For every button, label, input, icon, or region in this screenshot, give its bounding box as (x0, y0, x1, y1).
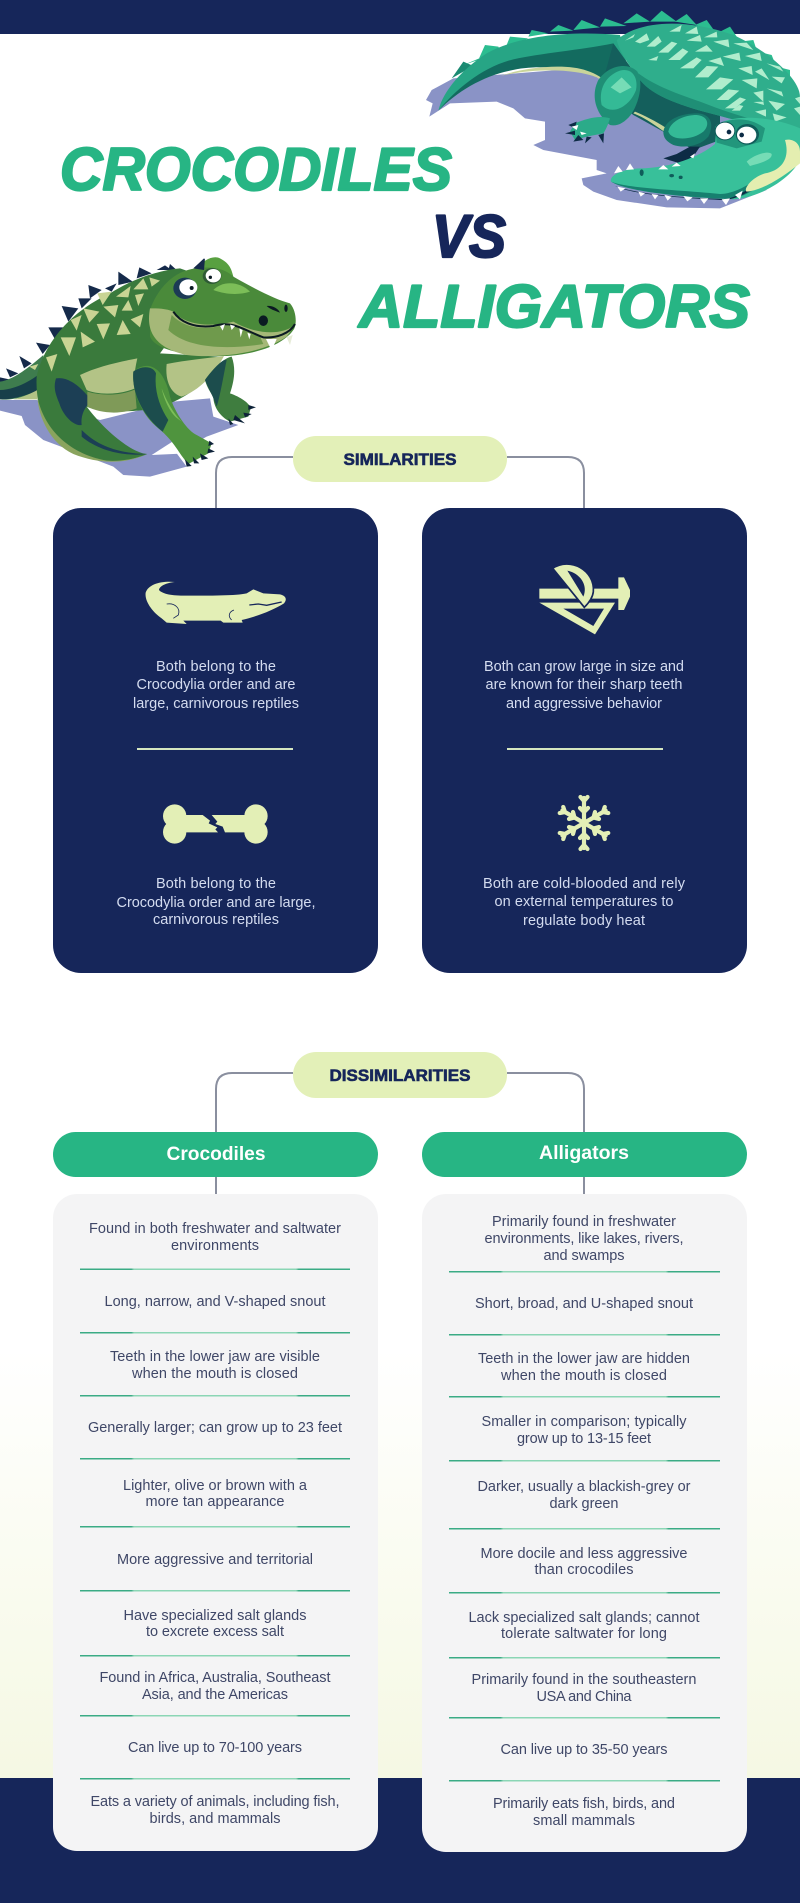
crocodile facts (88, 1221, 342, 1827)
crocodile facts: Lighter, olive or brown with a (123, 1478, 308, 1494)
far leg (205, 357, 251, 422)
pill: similarities heading (293, 436, 507, 482)
crocodile facts: More aggressive and territorial (117, 1552, 313, 1568)
alligator facts: tolerate saltwater for long (501, 1626, 667, 1642)
panel: similarities left card (53, 508, 378, 973)
spikes (0, 258, 206, 383)
icon: snowflake (559, 797, 609, 849)
head (150, 259, 296, 356)
back scales (29, 277, 160, 372)
alligator facts: dark green (550, 1496, 618, 1512)
text: cold-blooded: regulate body heat (523, 913, 645, 929)
pill: similarities heading: SIMILARITIES (344, 451, 456, 469)
icon: broken bone (163, 804, 268, 844)
crocodile facts: Found in Africa, Australia, Southeast (100, 1670, 330, 1686)
title: VS (432, 203, 506, 270)
nostrils (640, 169, 683, 179)
alligator facts: than crocodiles (534, 1562, 634, 1578)
body (617, 24, 800, 140)
text: crocodylia order 2: Both belong to the (156, 876, 276, 892)
panel: crocodiles column (53, 1132, 378, 1851)
pill: dissimilarities heading: DISSIMILARITIES (330, 1067, 470, 1085)
header: alligators: Alligators (539, 1143, 629, 1164)
crocodile facts: to excrete excess salt (146, 1624, 284, 1640)
belly (80, 358, 137, 394)
text: large size: Both can grow large in size and (484, 659, 684, 675)
illustration: crocodile top right (426, 11, 800, 208)
crocodile facts: Long, narrow, and V-shaped snout (104, 1294, 326, 1310)
alligator facts: and swamps (544, 1248, 624, 1264)
crocodile facts: Generally larger; can grow up to 23 feet (88, 1420, 342, 1436)
text: crocodylia order 2: Crocodylia order and are large, (116, 895, 316, 911)
text: crocodylia order: Crocodylia order and are (136, 677, 296, 693)
tail (0, 355, 43, 400)
connector: similarities (216, 457, 584, 508)
crocodile facts: Have specialized salt glands (124, 1608, 306, 1624)
teeth (614, 153, 743, 205)
text: crocodylia order 2: carnivorous reptiles (153, 912, 279, 928)
crocodile facts: Can live up to 70-100 years (128, 1740, 302, 1756)
text: cold-blooded: on external temperatures to (494, 894, 674, 910)
alligator facts: Teeth in the lower jaw are hidden (478, 1351, 690, 1367)
illustration: alligator left (0, 257, 296, 477)
back leg (595, 66, 640, 125)
title: CROCODILES (60, 136, 452, 203)
alligator facts: Primarily eats fish, birds, and (493, 1796, 675, 1812)
icon: crocodile silhouette (146, 582, 286, 624)
alligator facts: environments, like lakes, rivers, (484, 1231, 684, 1247)
alligator facts: Primarily found in freshwater (492, 1214, 676, 1230)
text: large size (484, 659, 684, 712)
alligator facts: Smaller in comparison; typically (482, 1414, 687, 1430)
tail (438, 34, 627, 111)
connector: dissimilarities (216, 1073, 584, 1194)
eyes (715, 122, 735, 140)
alligator facts: Primarily found in the southeastern (472, 1672, 696, 1688)
crocodile facts: when the mouth is closed (131, 1366, 298, 1382)
body scales (625, 25, 800, 122)
text: large size: and aggressive behavior (506, 696, 662, 712)
alligator facts: More docile and less aggressive (480, 1546, 688, 1562)
text: large size: are known for their sharp teeth (486, 677, 682, 693)
title (60, 136, 750, 340)
header: crocodiles (53, 1132, 378, 1177)
tail spikes (452, 11, 790, 78)
crocodile facts: more tan appearance (146, 1494, 284, 1510)
pill: dissimilarities heading (293, 1052, 507, 1098)
alligator facts: grow up to 13-15 feet (517, 1431, 651, 1447)
crocodile facts: Eats a variety of animals, including fish, (90, 1794, 340, 1810)
alligator facts: Darker, usually a blackish-grey or (478, 1479, 691, 1495)
eyes (173, 278, 197, 299)
alligator facts: Can live up to 35-50 years (500, 1742, 668, 1758)
rear belly (603, 43, 720, 150)
crocodile facts: environments (171, 1238, 259, 1254)
text: crocodylia order (133, 659, 299, 712)
icon: ruler and protractor (539, 564, 630, 634)
crocodile facts: Found in both freshwater and saltwater (89, 1221, 341, 1237)
panel: alligators column (422, 1132, 747, 1852)
text: cold-blooded (483, 876, 686, 929)
mouth (173, 312, 295, 337)
head (611, 118, 800, 199)
text: crocodylia order: large, carnivorous reptiles (133, 696, 299, 712)
nostrils (259, 315, 268, 326)
alligator facts: USA and China (536, 1689, 632, 1705)
alligator facts: small mammals (533, 1813, 635, 1829)
body (37, 268, 220, 461)
panel: similarities right card (422, 508, 747, 973)
text: cold-blooded: Both are cold-blooded and rely (483, 876, 686, 892)
title: ALLIGATORS (357, 273, 750, 340)
crocodile facts: Teeth in the lower jaw are visible (110, 1349, 320, 1365)
text: crocodylia order 2 (116, 876, 316, 928)
alligator facts: when the mouth is closed (500, 1368, 667, 1384)
crocodile facts: birds, and mammals (150, 1811, 280, 1827)
alligator facts: Lack specialized salt glands; cannot (468, 1610, 700, 1626)
header: crocodiles: Crocodiles (166, 1144, 266, 1165)
alligator facts: Short, broad, and U-shaped snout (475, 1296, 693, 1312)
front leg (663, 113, 711, 147)
alligator facts (468, 1214, 700, 1829)
header: alligators (422, 1132, 747, 1177)
near leg (133, 366, 212, 464)
crocodile facts: Asia, and the Americas (142, 1687, 288, 1703)
text: crocodylia order: Both belong to the (156, 659, 276, 675)
